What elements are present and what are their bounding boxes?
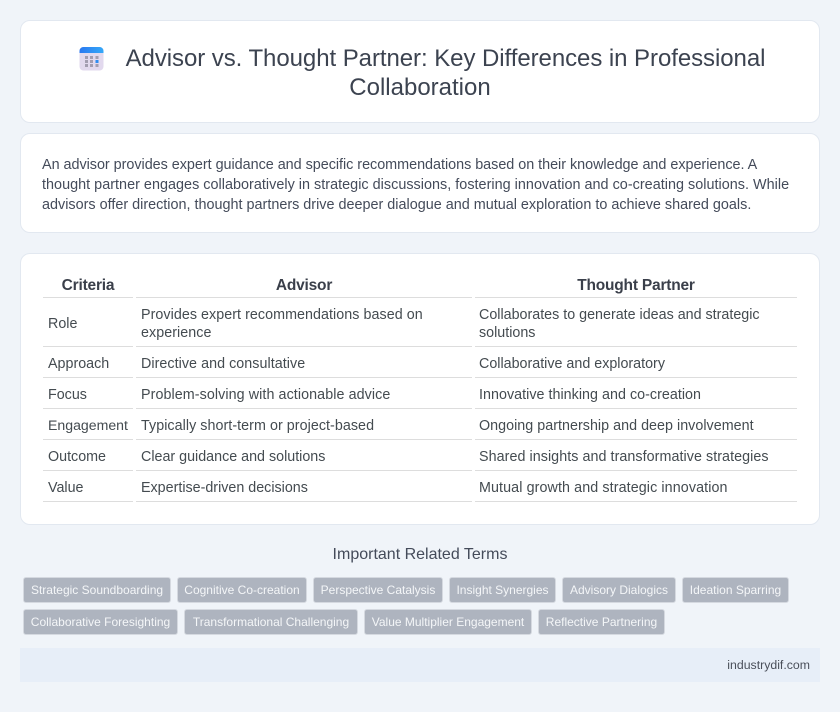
header card [20, 20, 820, 123]
related term tags [23, 577, 789, 635]
row: Approach: Directive and consultative [141, 356, 305, 372]
row: Outcome: Outcome [48, 449, 106, 465]
row: Outcome: Clear guidance and solutions [141, 449, 325, 465]
related term tags: Strategic Soundboarding [31, 583, 163, 597]
row: Outcome: Shared insights and transformative strategies [479, 449, 769, 465]
related term tags: Insight Synergies [456, 583, 549, 597]
row: Role: experience [141, 325, 211, 341]
related term tags: Transformational Challenging [193, 615, 349, 629]
source credit: industrydif.com [727, 658, 810, 672]
related terms heading: Important Related Terms [333, 546, 507, 563]
row: Focus: Innovative thinking and co-creation [479, 387, 701, 403]
row: Approach [48, 356, 665, 372]
intro text: An advisor provides expert guidance and specific recommendations based on their knowledge and experience. A [42, 157, 757, 173]
row: Value: Value [48, 480, 84, 496]
row: Outcome [48, 449, 769, 465]
intro text: thought partner engages collaboratively in strategic discussions, fostering innovation and co-creating solutions. While [42, 177, 789, 193]
row: Role: Role [48, 316, 77, 332]
row: Focus: Problem-solving with actionable advice [141, 387, 390, 403]
footer bar [20, 648, 820, 682]
row: Engagement [48, 417, 754, 434]
row: Engagement: Ongoing partnership and deep involvement [479, 418, 754, 434]
related term tags: Value Multiplier Engagement [372, 615, 524, 629]
row: Role: solutions [479, 325, 535, 341]
intro paragraph card [20, 133, 820, 233]
row: Value: Mutual growth and strategic innovation [479, 480, 728, 496]
title: Advisor vs. Thought Partner: Key Differences in Professional [126, 45, 765, 72]
row: Role [48, 307, 760, 341]
comparison table card [20, 253, 820, 525]
row: Approach: Collaborative and exploratory [479, 356, 665, 372]
related term tags: Collaborative Foresighting [31, 615, 170, 629]
related term tags: Perspective Catalysis [321, 583, 435, 597]
related term tags: Advisory Dialogics [570, 583, 668, 597]
icon: calendar [80, 47, 104, 70]
related term tags: Ideation Sparring [690, 583, 781, 597]
row: Value [48, 480, 728, 496]
row: Role: Collaborates to generate ideas and strategic [479, 307, 760, 323]
title: Collaboration [349, 74, 491, 101]
row: Engagement: Typically short-term or project-based [141, 418, 374, 434]
related term tags: Cognitive Co-creation [184, 583, 300, 597]
intro text: advisors offer direction, thought partners drive deeper dialogue and mutual exploration to achieve shared goals. [42, 197, 751, 213]
table header: Advisor [276, 277, 332, 294]
intro text [42, 157, 789, 213]
table header [62, 277, 695, 294]
row: Approach: Approach [48, 356, 109, 372]
row: Focus [48, 387, 701, 403]
row: Role: Provides expert recommendations based on [141, 307, 423, 323]
title [126, 45, 765, 101]
table header: Criteria [62, 277, 114, 294]
row: Value: Expertise-driven decisions [141, 480, 308, 496]
related term tags: Reflective Partnering [546, 615, 657, 629]
row: Focus: Focus [48, 387, 87, 403]
table header: Thought Partner [577, 277, 695, 294]
row: Engagement: Engagement [48, 417, 128, 433]
